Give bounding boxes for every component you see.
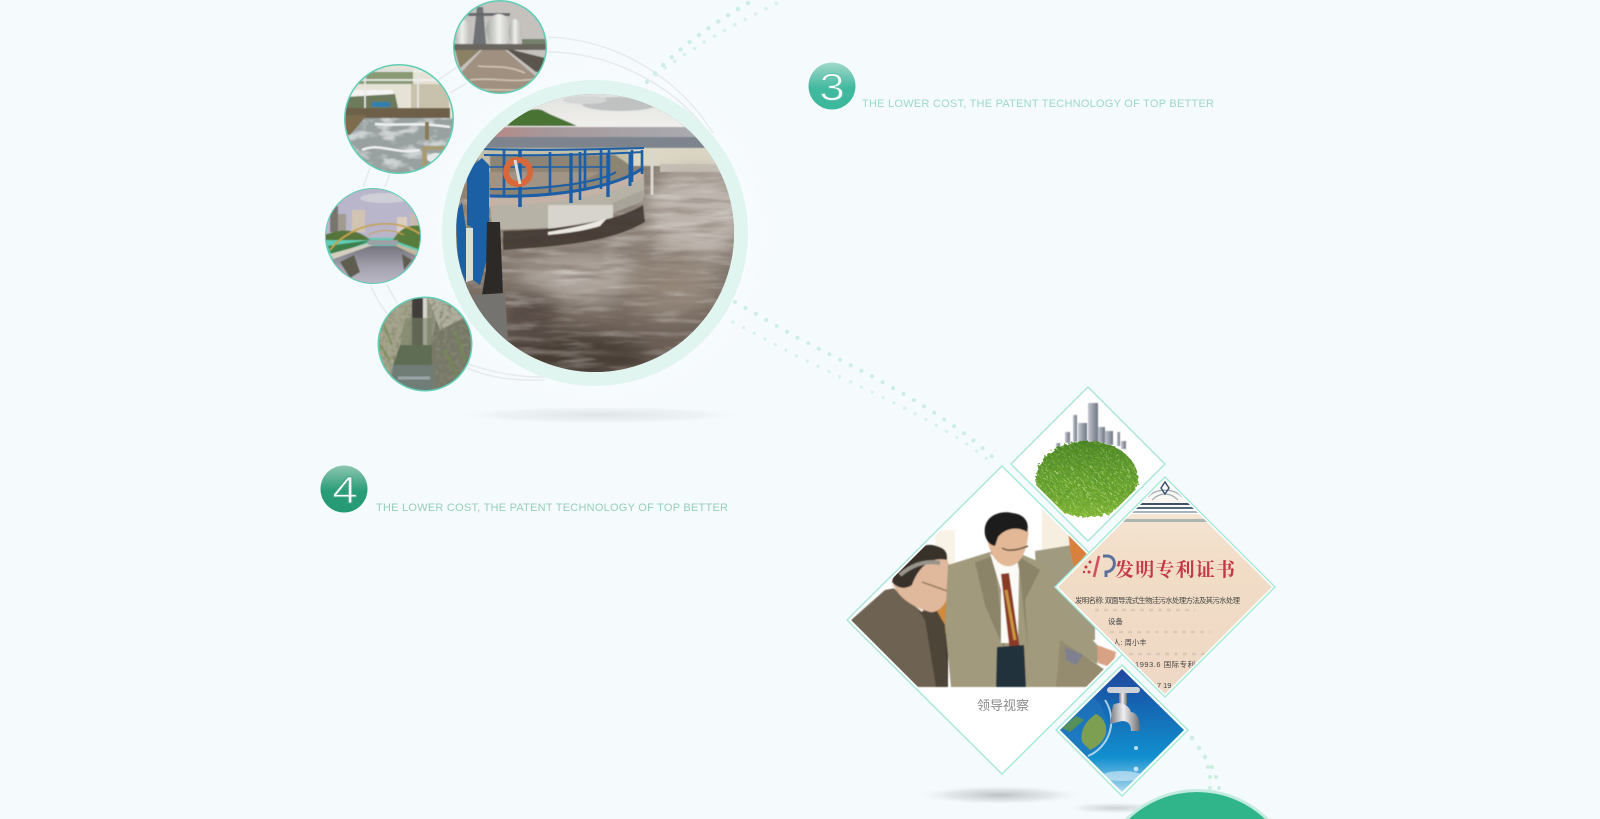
section 3 caption: THE LOWER COST, THE PATENT TECHNOLOGY OF TOP BETTER (862, 98, 1214, 110)
patent title: 发明专利证书 (1115, 558, 1236, 581)
patent logo (1083, 556, 1114, 577)
diamond: patent certificate (1055, 477, 1275, 704)
section 4 caption: THE LOWER COST, THE PATENT TECHNOLOGY OF TOP BETTER (376, 502, 728, 514)
photo: aeration basin (344, 64, 454, 174)
shadow under lead diamond (915, 785, 1085, 805)
photo: storage tanks (453, 0, 547, 94)
bottom green circle (1125, 789, 1269, 819)
diamond: green planet city (1011, 387, 1165, 541)
orbit rings behind photo circles (363, 37, 713, 380)
soft halo behind main photo (410, 43, 790, 423)
infographic canvas (320, 0, 1276, 819)
section 3 number badge: 3 (819, 66, 845, 108)
dotted trail: upper right of main photo (647, 2, 779, 82)
diamond: water tap and globe (1055, 664, 1189, 797)
patent body text (1075, 596, 1241, 690)
main photo: circular clarifier tank (442, 80, 748, 386)
patent body text: 发明名称: 双面导流式生物洼污水处理方法及其污水处理 (1075, 596, 1241, 605)
dotted trail: main photo to diamond cluster (733, 302, 999, 463)
shadow under tap diamond (1063, 802, 1167, 814)
section 4 number badge (320, 466, 368, 512)
patent body text: 人: 周小丰 (1113, 638, 1147, 647)
caption: leadership visit: 领导视察 (977, 698, 1029, 713)
patent body text: 7 19 (1157, 681, 1171, 690)
patent body text: 1993.6 国际专利 (1135, 660, 1195, 669)
photo: city canal (325, 188, 421, 290)
section 4 number badge: 4 (332, 469, 358, 511)
photo: stone channel (375, 295, 475, 395)
section 3 number badge (808, 62, 856, 110)
dotted trail: diamond cluster to bottom circle (1190, 736, 1221, 790)
patent body text: 设备 (1108, 617, 1123, 626)
diamond: leadership visit photo (846, 465, 1122, 775)
shadow under main photo (452, 406, 748, 424)
